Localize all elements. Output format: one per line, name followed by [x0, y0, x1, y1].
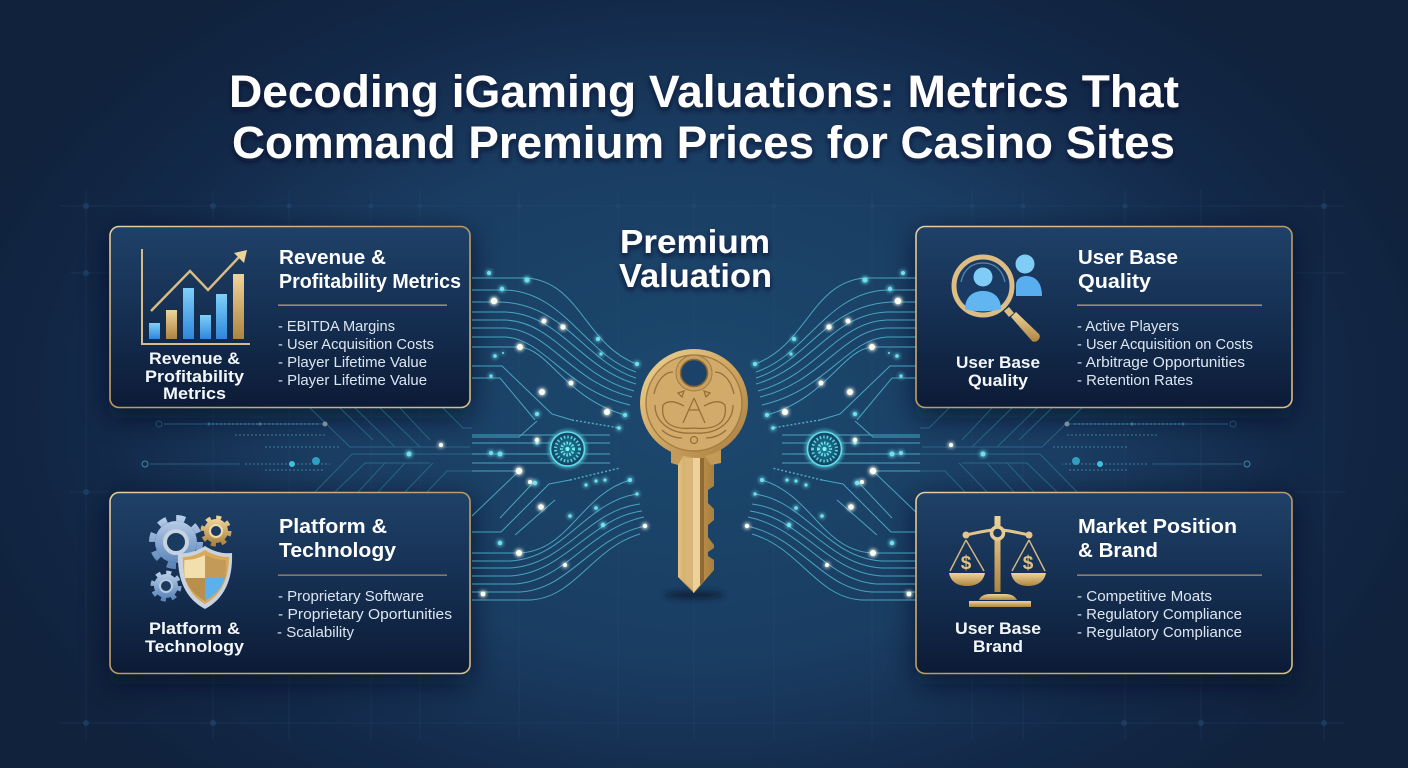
metric list	[1077, 318, 1253, 389]
heading	[1078, 247, 1178, 293]
metric list: - Competitive Moats	[1077, 588, 1212, 605]
panel: revenue and profitability metrics	[110, 226, 470, 408]
metric list	[1077, 588, 1242, 641]
icon: golden key	[640, 349, 748, 599]
heading: Quality	[1078, 271, 1152, 293]
heading	[1078, 516, 1237, 562]
icon label: User Base	[956, 353, 1040, 372]
metric list: - EBITDA Margins	[278, 318, 395, 335]
icon: balance scale: $	[1023, 553, 1034, 574]
center heading: Valuation	[619, 257, 772, 294]
heading: Profitability Metrics	[279, 271, 461, 293]
icon label: Brand	[973, 637, 1023, 656]
metric list: - Regulatory Compliance	[1077, 606, 1242, 623]
title: Decoding iGaming Valuations: Metrics That	[229, 66, 1179, 117]
icon label	[145, 619, 245, 656]
metric list: - Arbitrage Opportunities	[1077, 354, 1245, 371]
panel: market position and brand	[916, 492, 1292, 674]
icon: gears and shield	[152, 518, 232, 609]
heading	[279, 247, 461, 293]
metric list: - Scalability	[277, 624, 354, 641]
heading: & Brand	[1078, 540, 1158, 562]
metric list: - Retention Rates	[1077, 372, 1193, 389]
icon label: Profitability	[145, 367, 245, 386]
icon label: Quality	[968, 371, 1029, 390]
card shadows	[109, 232, 1292, 684]
icon label: Platform &	[149, 619, 240, 638]
metric list: - Proprietary Software	[278, 588, 424, 605]
heading: Platform &	[279, 516, 387, 538]
center heading: Premium	[620, 223, 770, 260]
icon: bar chart with rising arrow	[142, 249, 250, 344]
center heading	[619, 223, 772, 294]
metric list: - Active Players	[1077, 318, 1179, 335]
icon: balance scale: $	[961, 553, 972, 574]
metric list: - User Acquisition Costs	[278, 336, 434, 353]
icon label: Technology	[145, 637, 245, 656]
metric list: - Proprietary Oportunities	[278, 606, 452, 623]
icon label: Revenue &	[149, 349, 240, 368]
heading: Revenue &	[279, 247, 386, 269]
heading: User Base	[1078, 247, 1178, 269]
heading: Technology	[279, 540, 397, 562]
circuit lines: left	[142, 271, 647, 600]
metric list	[278, 318, 434, 389]
heading	[279, 516, 397, 562]
icon: balance scale	[949, 516, 1046, 607]
panel: user base quality	[916, 226, 1292, 408]
metric list: - Player Lifetime Value	[278, 354, 427, 371]
metric list	[277, 588, 452, 641]
panel: platform and technology	[110, 492, 470, 674]
background grid	[60, 190, 1345, 740]
metric list: - Player Lifetime Value	[278, 372, 427, 389]
metric list: - User Acquisition on Costs	[1077, 336, 1253, 353]
icon label: User Base	[955, 619, 1041, 638]
metric list: - Regulatory Compliance	[1077, 624, 1242, 641]
icon label	[145, 349, 245, 403]
icon label	[955, 619, 1041, 656]
circuit lines: right	[745, 271, 1250, 600]
title	[229, 66, 1179, 168]
title: Command Premium Prices for Casino Sites	[232, 117, 1175, 168]
icon label: Metrics	[163, 384, 226, 403]
icon label	[956, 353, 1040, 390]
icon: magnifier over users	[954, 254, 1042, 342]
heading: Market Position	[1078, 516, 1237, 538]
